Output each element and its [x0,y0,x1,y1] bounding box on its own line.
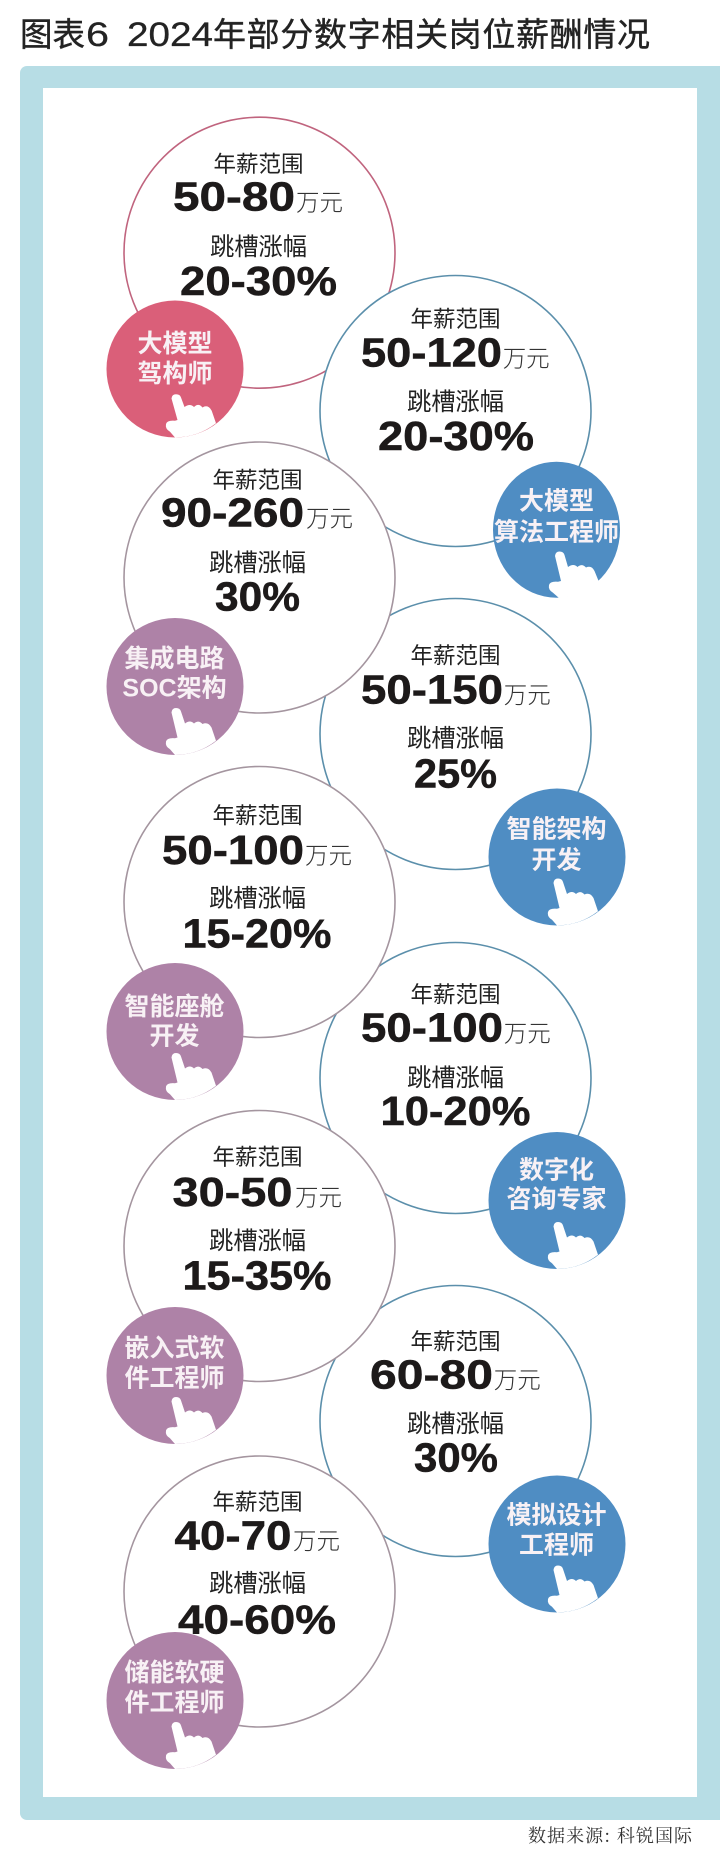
badge: 智能架构开发: 智能架构 [506,816,607,844]
badge: 智能座舱开发 [106,963,244,1100]
badge: 集成电路SOC架构 [106,618,244,755]
circle: 大模型驾构师 figures [124,117,395,388]
circle: 智能座舱开发 figures: 15-20% [182,910,332,956]
title [20,8,650,56]
circle: 数字化咨询专家 figures: 跳槽涨幅 [407,1059,504,1094]
circle: 大模型驾构师 figures: 跳槽涨幅 [210,228,307,263]
badge: 大模型驾构师: 驾构师 [137,360,213,388]
circle: 集成电路SOC架构 figures: 90-260 [161,490,304,536]
circle: 智能架构开发 figures: 50-150 [361,666,503,712]
badge: 大模型算法工程师: 算法工程师 [494,518,619,546]
circle: 嵌入式软件工程师 figures [124,1110,395,1382]
circle: 嵌入式软件工程师 figures: 跳槽涨幅 [209,1222,306,1257]
circle: 集成电路SOC架构 figures [124,442,395,713]
circle: 智能架构开发 figures: 跳槽涨幅 [407,720,504,755]
circle: 智能座舱开发 figures [124,766,395,1038]
circle: 嵌入式软件工程师 figures: 万元 [295,1179,342,1213]
badge: 储能软硬件工程师: 储能软硬 [124,1659,225,1687]
badge: 嵌入式软件工程师 [106,1307,244,1444]
badge: 集成电路SOC架构: 集成电路 [124,645,225,673]
badge: 模拟设计工程师: 工程师 [519,1532,594,1560]
circle: 模拟设计工程师 figures: 跳槽涨幅 [407,1405,504,1440]
badge: 集成电路SOC架构: SOC架构 [122,674,227,702]
circle: 集成电路SOC架构 figures: 万元 [306,500,353,534]
circle: 智能架构开发 figures: 25% [414,750,497,796]
badge: 储能软硬件工程师: 件工程师 [124,1689,225,1717]
circle: 智能座舱开发 figures: 50-100 [162,827,304,873]
circle: 模拟设计工程师 figures: 30% [414,1435,498,1481]
circle: 大模型算法工程师 figures: 20-30% [378,413,534,459]
badge: 智能架构开发: 开发 [531,846,582,874]
circle: 大模型驾构师 figures: 年薪范围 [214,147,304,179]
circle: 嵌入式软件工程师 figures: 30-50 [172,1169,292,1215]
circle: 智能架构开发 figures: 年薪范围 [410,638,500,670]
title: 图表 [20,8,85,56]
badge: 嵌入式软件工程师: 嵌入式软 [124,1334,225,1362]
circle: 数字化咨询专家 figures: 10-20% [380,1088,530,1134]
title: 6 [86,16,109,54]
circle: 模拟设计工程师 figures: 60-80 [370,1351,493,1397]
circle: 集成电路SOC架构 figures: 年薪范围 [212,463,302,495]
circle: 嵌入式软件工程师 figures: 年薪范围 [212,1140,302,1172]
badge: 模拟设计工程师: 模拟设计 [506,1502,607,1530]
circle: 储能软硬件工程师 figures [124,1456,395,1727]
circle: 智能座舱开发 figures: 跳槽涨幅 [209,880,306,915]
circle: 数字化咨询专家 figures: 万元 [504,1014,551,1048]
badge: 智能架构开发 [488,788,626,926]
source note: 数据来源: 科锐国际 [528,1822,693,1848]
circle: 大模型算法工程师 figures: 50-120 [361,330,502,376]
circle: 模拟设计工程师 figures: 年薪范围 [410,1324,500,1356]
circle: 数字化咨询专家 figures [320,942,591,1214]
circle: 智能架构开发 figures [320,598,591,870]
badge: 嵌入式软件工程师: 件工程师 [124,1364,225,1392]
circle: 大模型驾构师 figures: 20-30% [180,258,337,304]
badge: 大模型驾构师 [106,300,244,438]
title: 年部分数字相关岗位薪酬情况 [213,8,650,56]
circle: 模拟设计工程师 figures: 万元 [494,1361,541,1395]
circle: 大模型算法工程师 figures: 万元 [503,340,550,374]
circle: 智能座舱开发 figures: 万元 [305,837,352,871]
badge: 大模型驾构师: 大模型 [137,330,213,358]
badge: 智能座舱开发: 开发 [149,1022,200,1050]
badge: 大模型算法工程师: 大模型 [519,488,594,516]
badge: 大模型算法工程师 [493,462,620,598]
circle: 数字化咨询专家 figures: 年薪范围 [410,978,500,1010]
badge: 储能软硬件工程师 [106,1632,244,1769]
circle: 大模型算法工程师 figures [320,276,591,546]
circle: 储能软硬件工程师 figures: 40-70 [174,1512,292,1558]
badge: 智能座舱开发: 智能座舱 [124,993,225,1021]
badge: 数字化咨询专家 [488,1132,626,1269]
circle: 储能软硬件工程师 figures: 年薪范围 [212,1485,302,1517]
circle: 嵌入式软件工程师 figures: 15-35% [182,1252,332,1298]
circle: 大模型算法工程师 figures: 年薪范围 [410,302,500,334]
circle: 模拟设计工程师 figures [320,1286,591,1556]
badge: 模拟设计工程师 [488,1476,626,1612]
circle: 智能座舱开发 figures: 年薪范围 [212,798,302,830]
circle: 储能软硬件工程师 figures: 40-60% [178,1596,336,1642]
badge: 数字化咨询专家: 咨询专家 [506,1186,607,1214]
badge: 数字化咨询专家: 数字化 [519,1157,594,1185]
circle: 大模型算法工程师 figures: 跳槽涨幅 [407,383,504,418]
circle: 智能架构开发 figures: 万元 [504,676,551,710]
title: 2024 [127,16,213,54]
circle: 储能软硬件工程师 figures: 万元 [293,1522,340,1556]
circle: 集成电路SOC架构 figures: 30% [215,574,300,620]
circle: 大模型驾构师 figures: 万元 [296,184,343,218]
circle: 大模型驾构师 figures: 50-80 [173,174,295,220]
circle: 集成电路SOC架构 figures: 跳槽涨幅 [209,544,306,579]
circle: 储能软硬件工程师 figures: 跳槽涨幅 [209,1565,306,1600]
circle: 数字化咨询专家 figures: 50-100 [361,1005,503,1051]
